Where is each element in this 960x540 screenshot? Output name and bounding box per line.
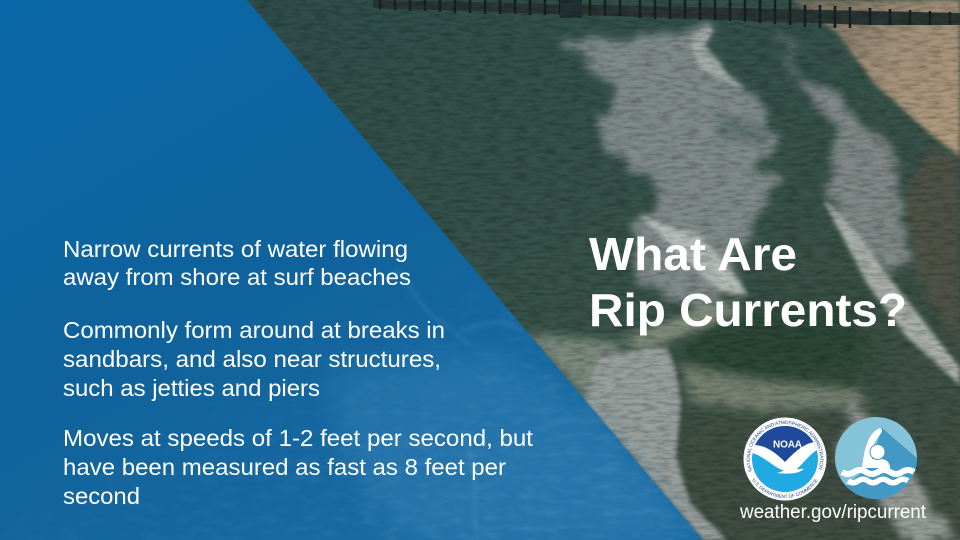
badge long shadow [846,428,917,499]
dark shadow gap in foam [715,112,770,146]
point three [63,425,534,509]
lighter water patch [330,350,690,540]
NOAA wordmark: NOAA [773,440,802,450]
foam band two [777,30,906,270]
title: What Are [589,228,797,280]
bright surf edge [690,25,745,90]
bright white surf crest [640,215,748,295]
upper left foam streaks [525,333,620,398]
swimmer figure [862,428,890,468]
ring text: NATIONAL OCEANIC AND ATMOSPHERIC ADMINISTRATION [746,420,824,472]
lower right foam [838,400,960,540]
bright inner surf strip [823,200,960,385]
point two: such as jetties and piers [63,375,320,401]
website url: weather.gov/ripcurrent [739,502,927,523]
point one [63,236,411,290]
upper foam strip [620,300,745,350]
wet sand lower right [905,150,960,350]
point three: second [63,483,140,509]
waves [842,470,914,483]
point two [63,317,445,401]
title [589,228,907,336]
foam band one [561,25,782,310]
diffuse foam strip [680,363,870,412]
icon: swimmer badge [835,417,917,499]
icon: NOAA logo [744,418,826,500]
mottled water texture [226,375,695,540]
point two: Commonly form around at breaks in [63,317,445,343]
photo grain [245,0,960,540]
point three: have been measured as fast as 8 feet per [63,454,506,480]
point three: Moves at speeds of 1-2 feet per second, but [63,425,534,451]
icon: NOAA logo: U.S. DEPARTMENT OF COMMERCE [752,478,818,498]
point two: sandbars, and also near structures, [63,346,441,372]
lower green water [680,410,900,540]
faint foam texture [395,268,522,540]
point one: Narrow currents of water flowing [63,236,408,262]
body text block [63,236,534,509]
large foam patch [584,346,727,540]
title: Rip Currents? [589,284,907,336]
dark water patch [680,305,870,385]
sand beach [791,0,960,157]
blue diagonal panel [0,0,703,540]
pier [373,0,960,28]
point one: away from shore at surf beaches [63,264,411,290]
